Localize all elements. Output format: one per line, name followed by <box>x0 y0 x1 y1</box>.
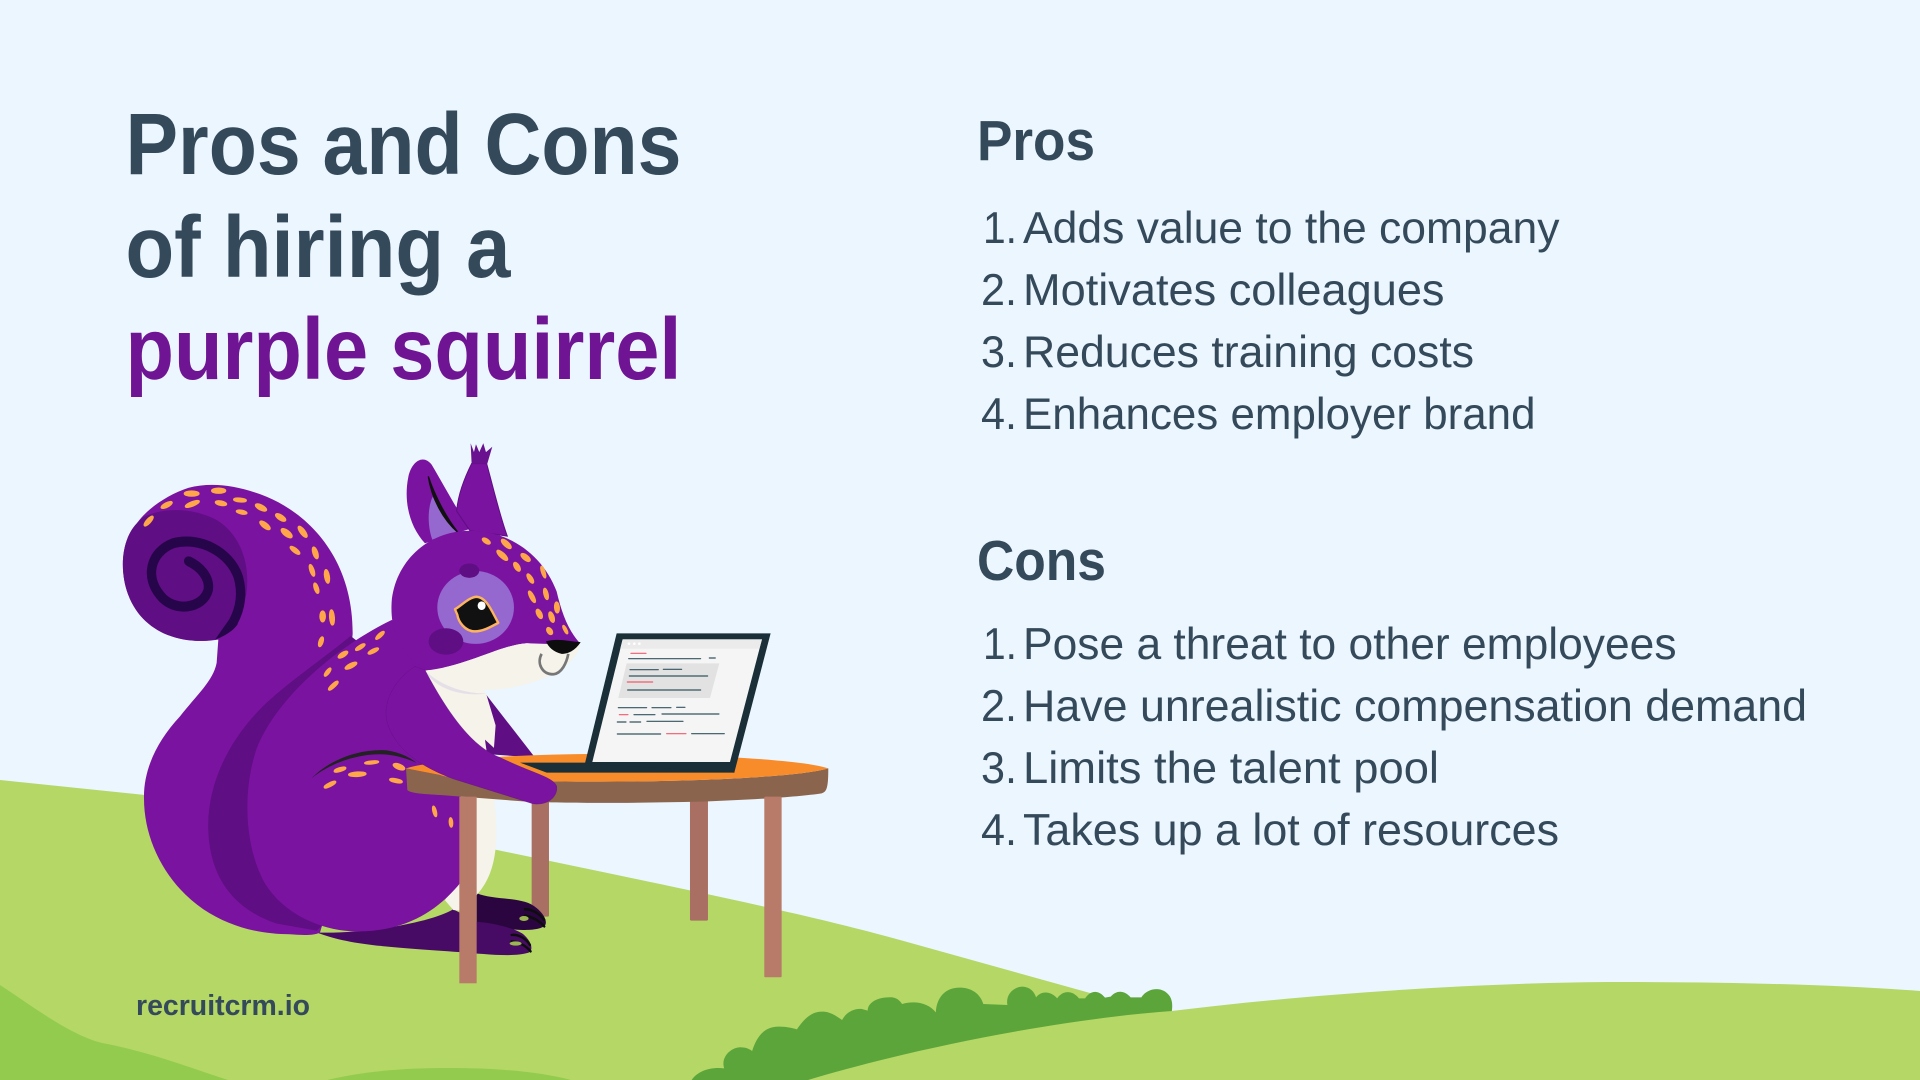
cons list: 3. <box>981 744 1017 793</box>
screen box <box>618 663 719 698</box>
haunch line <box>312 750 417 778</box>
pros list: Enhances employer brand <box>1023 390 1536 439</box>
front foot <box>317 909 531 955</box>
forehead spot <box>459 564 479 578</box>
cons list: Limits the talent pool <box>1023 744 1439 793</box>
eye highlight <box>478 601 486 610</box>
footer url: recruitcrm.io <box>136 990 310 1022</box>
table rear legs <box>532 797 708 921</box>
head <box>391 531 580 671</box>
pros list: 3. <box>981 328 1017 377</box>
white belly <box>445 791 496 911</box>
cons heading: Cons <box>977 529 1106 593</box>
tail <box>123 485 367 935</box>
body <box>247 620 467 931</box>
cheek <box>429 628 463 655</box>
tail curl <box>123 510 247 641</box>
title: Pros and Cons <box>126 96 682 193</box>
dark hill bottom left <box>0 985 228 1080</box>
cons list: 4. <box>981 806 1017 855</box>
pros list: Reduces training costs <box>1023 328 1474 377</box>
squirrel arm <box>386 666 557 804</box>
white chest <box>425 670 496 751</box>
screen text lines <box>617 653 724 734</box>
pros list: 1. <box>983 204 1017 253</box>
pros heading: Pros <box>977 109 1095 173</box>
dark hill bump bottom <box>327 1068 571 1080</box>
dark chest <box>483 693 535 757</box>
front right hill <box>808 982 1920 1080</box>
tabletop edge <box>406 768 828 803</box>
tabletop surface <box>406 754 828 782</box>
browser bar <box>620 639 762 649</box>
front leg left <box>459 797 477 983</box>
mouth <box>540 654 568 674</box>
pros list <box>981 204 1560 439</box>
toe highlights <box>510 916 529 946</box>
chin shadow <box>425 671 487 694</box>
orange spots <box>143 488 569 827</box>
title: purple squirrel <box>126 301 682 398</box>
front leg right <box>764 797 782 977</box>
back foot <box>477 893 546 930</box>
green bush <box>692 987 1172 1080</box>
cons list: Takes up a lot of resources <box>1023 806 1559 855</box>
toes <box>512 909 544 951</box>
cons list: Pose a threat to other employees <box>1023 620 1676 669</box>
squirrel <box>123 443 581 955</box>
tail spiral <box>151 541 241 640</box>
laptop frame <box>585 633 771 773</box>
tail dark band <box>208 636 367 931</box>
laptop base <box>520 763 734 773</box>
muzzle <box>425 643 580 690</box>
eye <box>455 597 498 631</box>
browser dots <box>628 642 641 645</box>
pros list: 2. <box>981 266 1017 315</box>
nose <box>546 640 581 654</box>
ear right <box>457 464 507 536</box>
pros list: 4. <box>981 390 1017 439</box>
eye patch <box>437 571 514 644</box>
cons list: Have unrealistic compensation demand <box>1023 682 1807 731</box>
cons list <box>981 620 1807 855</box>
back hill <box>0 780 1180 1080</box>
table and laptop <box>406 633 828 983</box>
ear line <box>428 476 458 532</box>
cons list: 1. <box>983 620 1017 669</box>
laptop screen <box>592 639 762 762</box>
ear inner <box>429 497 457 540</box>
pros list: Motivates colleagues <box>1023 266 1444 315</box>
title <box>126 96 682 398</box>
cons list: 2. <box>981 682 1017 731</box>
ear left <box>407 460 470 543</box>
pros list: Adds value to the company <box>1023 204 1560 253</box>
title: of hiring a <box>126 199 511 296</box>
ear tuft <box>471 443 492 464</box>
